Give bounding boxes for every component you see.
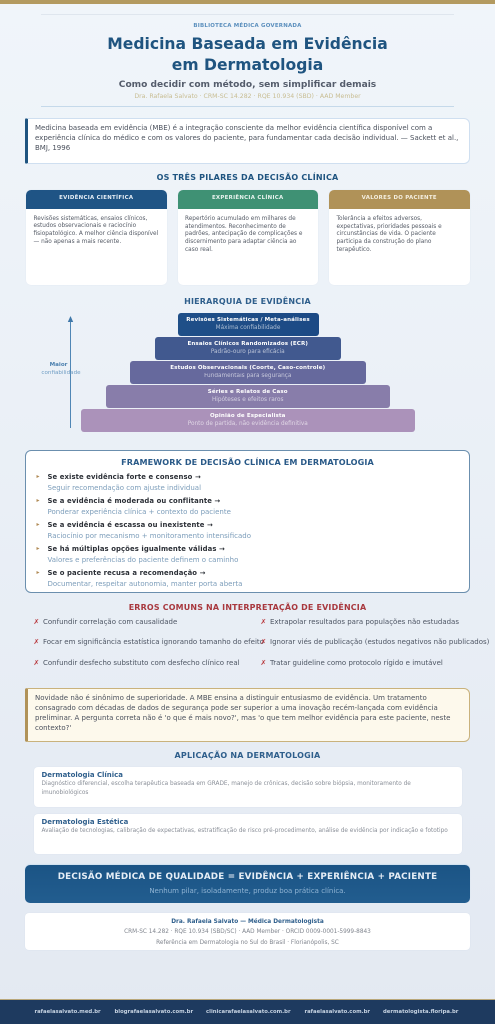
panel: valores do paciente: participa da construção do plano xyxy=(336,239,431,245)
footer bar with links xyxy=(0,999,495,1024)
callout: novidade: contexto?' xyxy=(35,724,71,732)
panel: decision framework: ▸ xyxy=(36,569,40,576)
panel: evidência científica: estudos observacionais e raciocínio xyxy=(34,223,136,229)
level 2: Ensaios Clínicos Randomizados (ECR) xyxy=(187,341,308,347)
panel: valores do paciente: Tolerância a efeitos adversos, xyxy=(336,216,422,222)
panel: experiência clínica: Repertório acumulado em milhares de xyxy=(185,216,296,222)
panel: decision framework: Se o paciente recusa a recomendação → xyxy=(48,569,205,577)
signature card: Dra. Rafaela Salvato — Médica Dermatologista xyxy=(171,918,324,924)
panel: valores do paciente: VALORES DO PACIENTE xyxy=(362,195,437,201)
list: common errors: ✗ xyxy=(34,658,39,666)
arrow: increasing reliability xyxy=(68,316,74,428)
panel: evidência científica: EVIDÊNCIA CIENTÍFICA xyxy=(59,195,133,201)
list: common errors: ✗ xyxy=(260,658,266,666)
list: common errors: Confundir correlação com causalidade xyxy=(43,618,177,626)
footer bar with links: blografaelasalvato.com.br xyxy=(114,1008,193,1014)
footer bar with links: clinicarafaelasalvato.com.br xyxy=(206,1008,291,1014)
panel: decision framework xyxy=(25,450,470,593)
level 3: Estudos Observacionais (Coorte, Caso-controle) xyxy=(170,365,325,371)
callout: novidade: Novidade não é sinônimo de superioridade. A MBE ensina a distinguir entusiasmo de evidência. Um tratamento xyxy=(35,694,427,702)
framework heading: FRAMEWORK DE DECISÃO CLÍNICA EM DERMATOLOGIA xyxy=(121,456,374,466)
panel: decision framework: ▸ xyxy=(36,497,40,504)
level 1 xyxy=(178,313,318,336)
panel: decision framework: Seguir recomendação com ajuste individual xyxy=(48,484,201,492)
header: em Dermatologia xyxy=(172,56,323,74)
list: common errors: ✗ xyxy=(34,618,39,626)
panel: decision framework: Valores e preferências do paciente definem o caminho xyxy=(48,556,238,564)
panel: evidência científica xyxy=(26,190,166,285)
panel: decision framework: Ponderar experiência clínica + contexto do paciente xyxy=(48,508,231,516)
footer bar with links: rafaelasalvato.com.br xyxy=(304,1008,370,1014)
callout: novidade: consagrado com décadas de dados de segurança pode ser superior a uma inovação recém-lançada com evidência xyxy=(35,704,438,712)
callout: novidade: preliminar. A pergunta correta não é 'o que é mais novo?', mas 'o que tem melhor evidência para este paciente, neste xyxy=(35,714,450,722)
header: Medicina Baseada em Evidência xyxy=(107,35,388,53)
card: dermatologia clínica: Diagnóstico diferencial, escolha terapêutica baseada em GRADE, manejo de crônicas, decisão sobre biópsia, monitoramento de xyxy=(42,781,411,787)
header: Dra. Rafaela Salvato · CRM-SC 14.282 · RQE 10.934 (SBD) · AAD Member xyxy=(134,92,361,100)
banner: decisão médica de qualidade: DECISÃO MÉDICA DE QUALIDADE = EVIDÊNCIA + EXPERIÊNCIA + PACIENTE xyxy=(58,872,437,882)
panel: evidência científica: — não apenas a mais recente. xyxy=(34,238,121,244)
level 1: Máxima confiabilidade xyxy=(216,325,280,331)
panel: experiência clínica: padrões, antecipação de complicações e xyxy=(185,231,302,237)
panel: valores do paciente: expectativas, prioridades pessoais e xyxy=(336,224,442,230)
signature card xyxy=(25,913,470,950)
level 5 xyxy=(80,409,415,432)
level 2 xyxy=(154,337,341,360)
heading: hierarchy: HIERARQUIA DE EVIDÊNCIA xyxy=(184,297,311,306)
list: common errors: ✗ xyxy=(260,618,266,626)
banner: decisão médica de qualidade xyxy=(25,865,470,902)
level 1: Revisões Sistemáticas / Meta-análises xyxy=(186,317,310,323)
list: common errors: ✗ xyxy=(34,638,39,646)
list: common errors: Extrapolar resultados para populações não estudadas xyxy=(270,618,459,626)
level 4: Hipóteses e efeitos raros xyxy=(212,397,284,403)
panel: valores do paciente xyxy=(329,190,470,285)
list: common errors xyxy=(34,618,489,666)
panel: experiência clínica: caso real. xyxy=(185,247,213,253)
card: dermatologia estética xyxy=(34,814,462,854)
panel: experiência clínica: discernimento para adaptar ciência ao xyxy=(185,239,296,245)
panel: decision framework: Documentar, respeitar autonomia, manter porta aberta xyxy=(48,580,242,588)
pyramid: hierarchy of evidence xyxy=(81,313,415,432)
heading: errors: ERROS COMUNS NA INTERPRETAÇÃO DE EVIDÊNCIA xyxy=(129,602,366,612)
list: common errors: Focar em significância estatística ignorando tamanho do efeito xyxy=(43,638,264,646)
level 3 xyxy=(130,361,366,384)
definition box: experiência clínica do médico e com os valores do paciente, para fundamentar cada decisão individual. — Sackett et al., xyxy=(35,134,458,142)
top gold bar xyxy=(0,0,495,4)
panel: valores do paciente: terapêutico. xyxy=(336,247,371,253)
definition box: BMJ, 1996 xyxy=(35,144,70,152)
header: BIBLIOTECA MÉDICA GOVERNADA xyxy=(193,23,302,29)
card: dermatologia clínica xyxy=(34,767,462,807)
panel: decision framework: ▸ xyxy=(36,473,40,480)
level 5: Opinião de Especialista xyxy=(210,413,286,419)
banner: decisão médica de qualidade: Nenhum pilar, isoladamente, produz boa prática clínica. xyxy=(149,886,346,894)
card: dermatologia estética: Dermatologia Estética xyxy=(42,818,128,826)
card: dermatologia clínica: imunobiológicos xyxy=(42,790,88,796)
panel: decision framework: ▸ xyxy=(36,521,40,528)
panel: valores do paciente: circunstâncias de vida. O paciente xyxy=(336,231,436,237)
header xyxy=(41,14,454,107)
panel: experiência clínica: atendimentos. Reconhecimento de xyxy=(185,224,286,230)
level 4 xyxy=(106,385,390,408)
footer bar with links: rafaelasalvato.med.br xyxy=(34,1008,101,1014)
level 4: Séries e Relatos de Caso xyxy=(208,389,288,395)
panel: decision framework: ▸ xyxy=(36,545,40,552)
signature card: CRM-SC 14.282 · RQE 10.934 (SBD/SC) · AAD Member · ORCID 0009-0001-5999-8843 xyxy=(124,929,371,935)
list: common errors: Tratar guideline como protocolo rígido e imutável xyxy=(270,658,443,666)
heading: application: APLICAÇÃO NA DERMATOLOGIA xyxy=(175,751,320,760)
panel: experiência clínica: EXPERIÊNCIA CLÍNICA xyxy=(212,195,284,201)
panel: evidência científica: Revisões sistemáticas, ensaios clínicos, xyxy=(34,216,147,222)
panel: decision framework: Raciocínio por mecanismo + monitoramento intensificado xyxy=(48,532,251,540)
list: common errors: Confundir desfecho substituto com desfecho clínico real xyxy=(43,658,240,666)
panel: decision framework: Se há múltiplas opções igualmente válidas → xyxy=(48,545,225,553)
panel: decision framework: Se a evidência é escassa ou inexistente → xyxy=(48,521,213,529)
panel: evidência científica: fisiopatológico. A melhor ciência disponível xyxy=(34,230,158,236)
list: common errors: Ignorar viés de publicação (estudos negativos não publicados) xyxy=(270,638,489,646)
card: dermatologia estética: Avaliação de tecnologias, calibração de expectativas, estratificação de risco pré-procedimento, análise de evidência por indicação e fototipo xyxy=(42,828,448,834)
signature card: Referência em Dermatologia no Sul do Brasil · Florianópolis, SC xyxy=(156,940,339,946)
card: dermatologia clínica: Dermatologia Clínica xyxy=(42,770,123,778)
callout: novidade xyxy=(25,688,470,742)
heading: pillars: OS TRÊS PILARES DA DECISÃO CLÍNICA xyxy=(157,173,338,182)
definition box xyxy=(25,118,470,164)
panel: experiência clínica xyxy=(178,190,318,285)
level 2: Padrão-ouro para eficácia xyxy=(211,349,285,355)
panel: decision framework: Se a evidência é moderada ou conflitante → xyxy=(48,497,220,505)
panel: decision framework: Se existe evidência forte e consenso → xyxy=(48,473,201,481)
definition box: Medicina baseada em evidência (MBE) é a integração consciente da melhor evidência científica disponível com a xyxy=(35,124,432,132)
header: Como decidir com método, sem simplificar demais xyxy=(119,80,376,90)
label: maior confiabilidade: Maior xyxy=(50,362,67,368)
label: maior confiabilidade: confiabilidade xyxy=(41,370,81,376)
label: maior confiabilidade xyxy=(41,362,81,376)
footer bar with links: dermatologista.floripa.br xyxy=(383,1008,458,1014)
level 5: Ponto de partida, não evidência definitiva xyxy=(188,421,308,427)
level 3: Fundamentais para segurança xyxy=(204,373,291,379)
list: common errors: ✗ xyxy=(260,638,266,646)
